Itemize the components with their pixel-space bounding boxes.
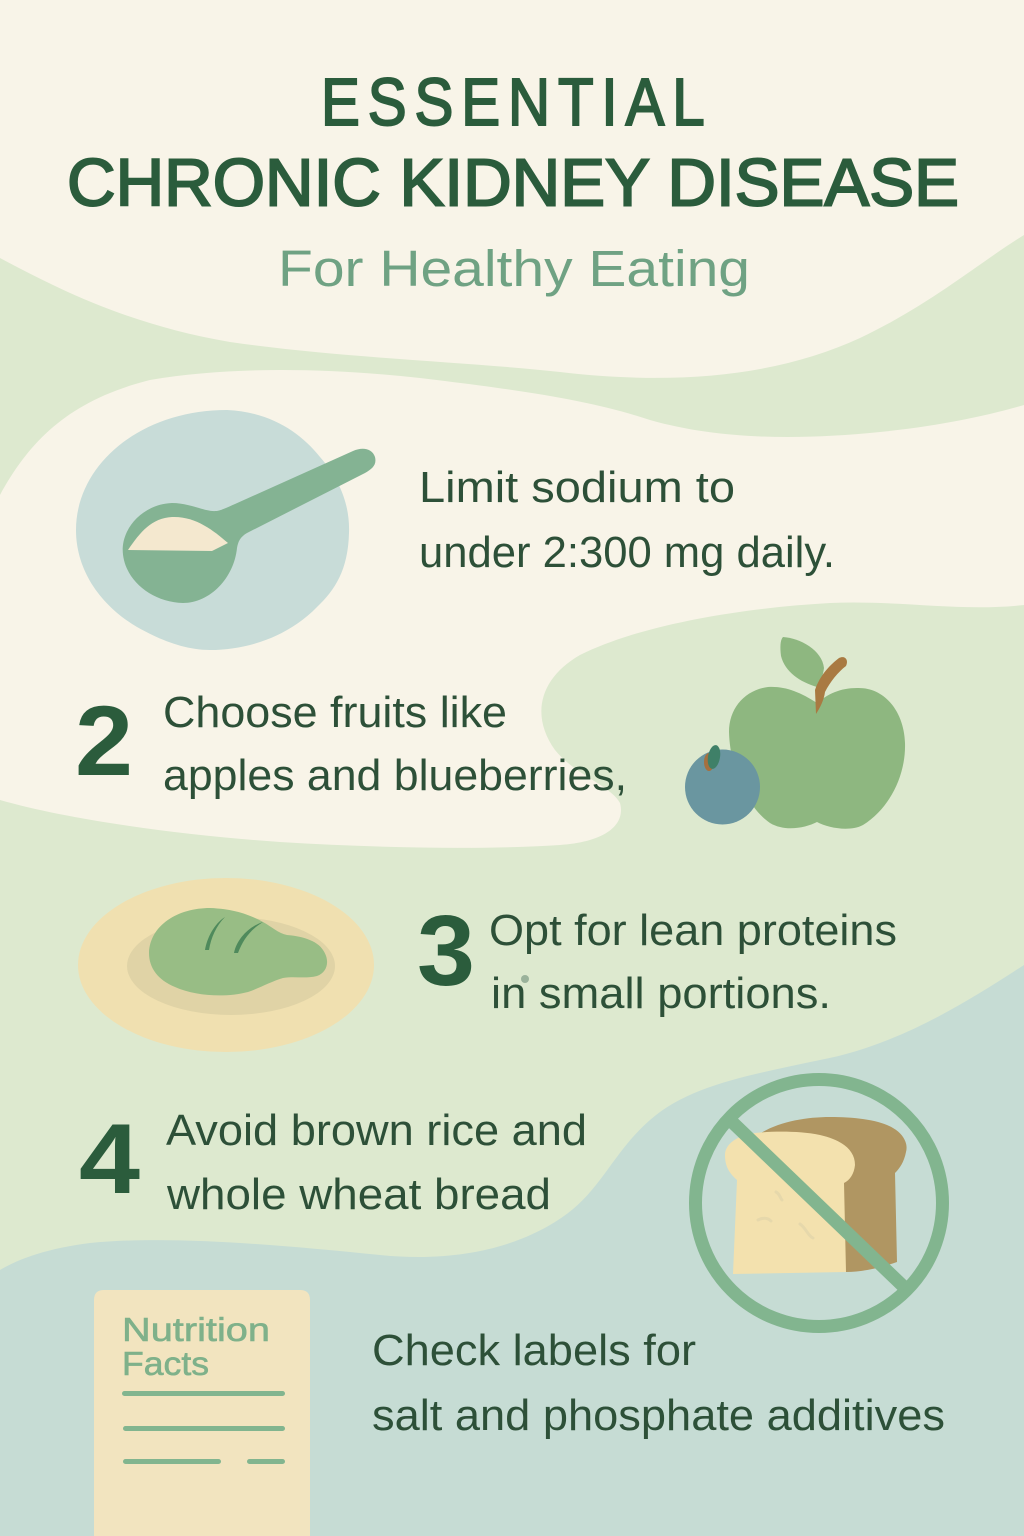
text: step 3: in small portions.	[491, 969, 831, 1018]
title: CHRONIC KIDNEY DISEASE	[67, 146, 959, 220]
text: step 4	[166, 1106, 587, 1219]
text: step 4: Avoid brown rice and	[166, 1106, 587, 1155]
icon: nutrition facts label: Nutrition	[122, 1311, 270, 1348]
text: step 1: Limit sodium to	[419, 463, 735, 512]
text: step 3	[489, 906, 897, 1018]
text: step 2	[163, 688, 627, 800]
text: step 5: salt and phosphate additives	[372, 1391, 945, 1440]
icon: nutrition facts label: Facts	[122, 1345, 209, 1382]
icon: spoon with salt	[76, 410, 375, 650]
title	[67, 65, 959, 220]
text: step 2: apples and blueberries,	[163, 751, 627, 800]
text: step 5	[372, 1326, 945, 1440]
number 3: 3	[417, 895, 475, 1007]
number 2: 2	[75, 685, 133, 796]
icon: no bread	[696, 1080, 942, 1326]
text: step 2: Choose fruits like	[163, 688, 507, 737]
subtitle: For Healthy Eating	[278, 240, 750, 297]
icon: nutrition facts label	[94, 1290, 310, 1536]
title: ESSENTIAL	[321, 65, 705, 140]
text: step 3: Opt for lean proteins	[489, 906, 897, 955]
text: step 5: Check labels for	[372, 1326, 696, 1375]
background: cream blob	[0, 370, 1024, 848]
icon: plate with lean protein	[78, 878, 374, 1052]
text: step 1: under 2:300 mg daily.	[419, 528, 835, 577]
text: step 4: whole wheat bread	[166, 1170, 551, 1219]
number 4: 4	[79, 1103, 140, 1214]
icon: apple and blueberry	[685, 637, 905, 829]
text: step 1	[419, 463, 835, 577]
background: blue-green wave	[0, 965, 1024, 1536]
